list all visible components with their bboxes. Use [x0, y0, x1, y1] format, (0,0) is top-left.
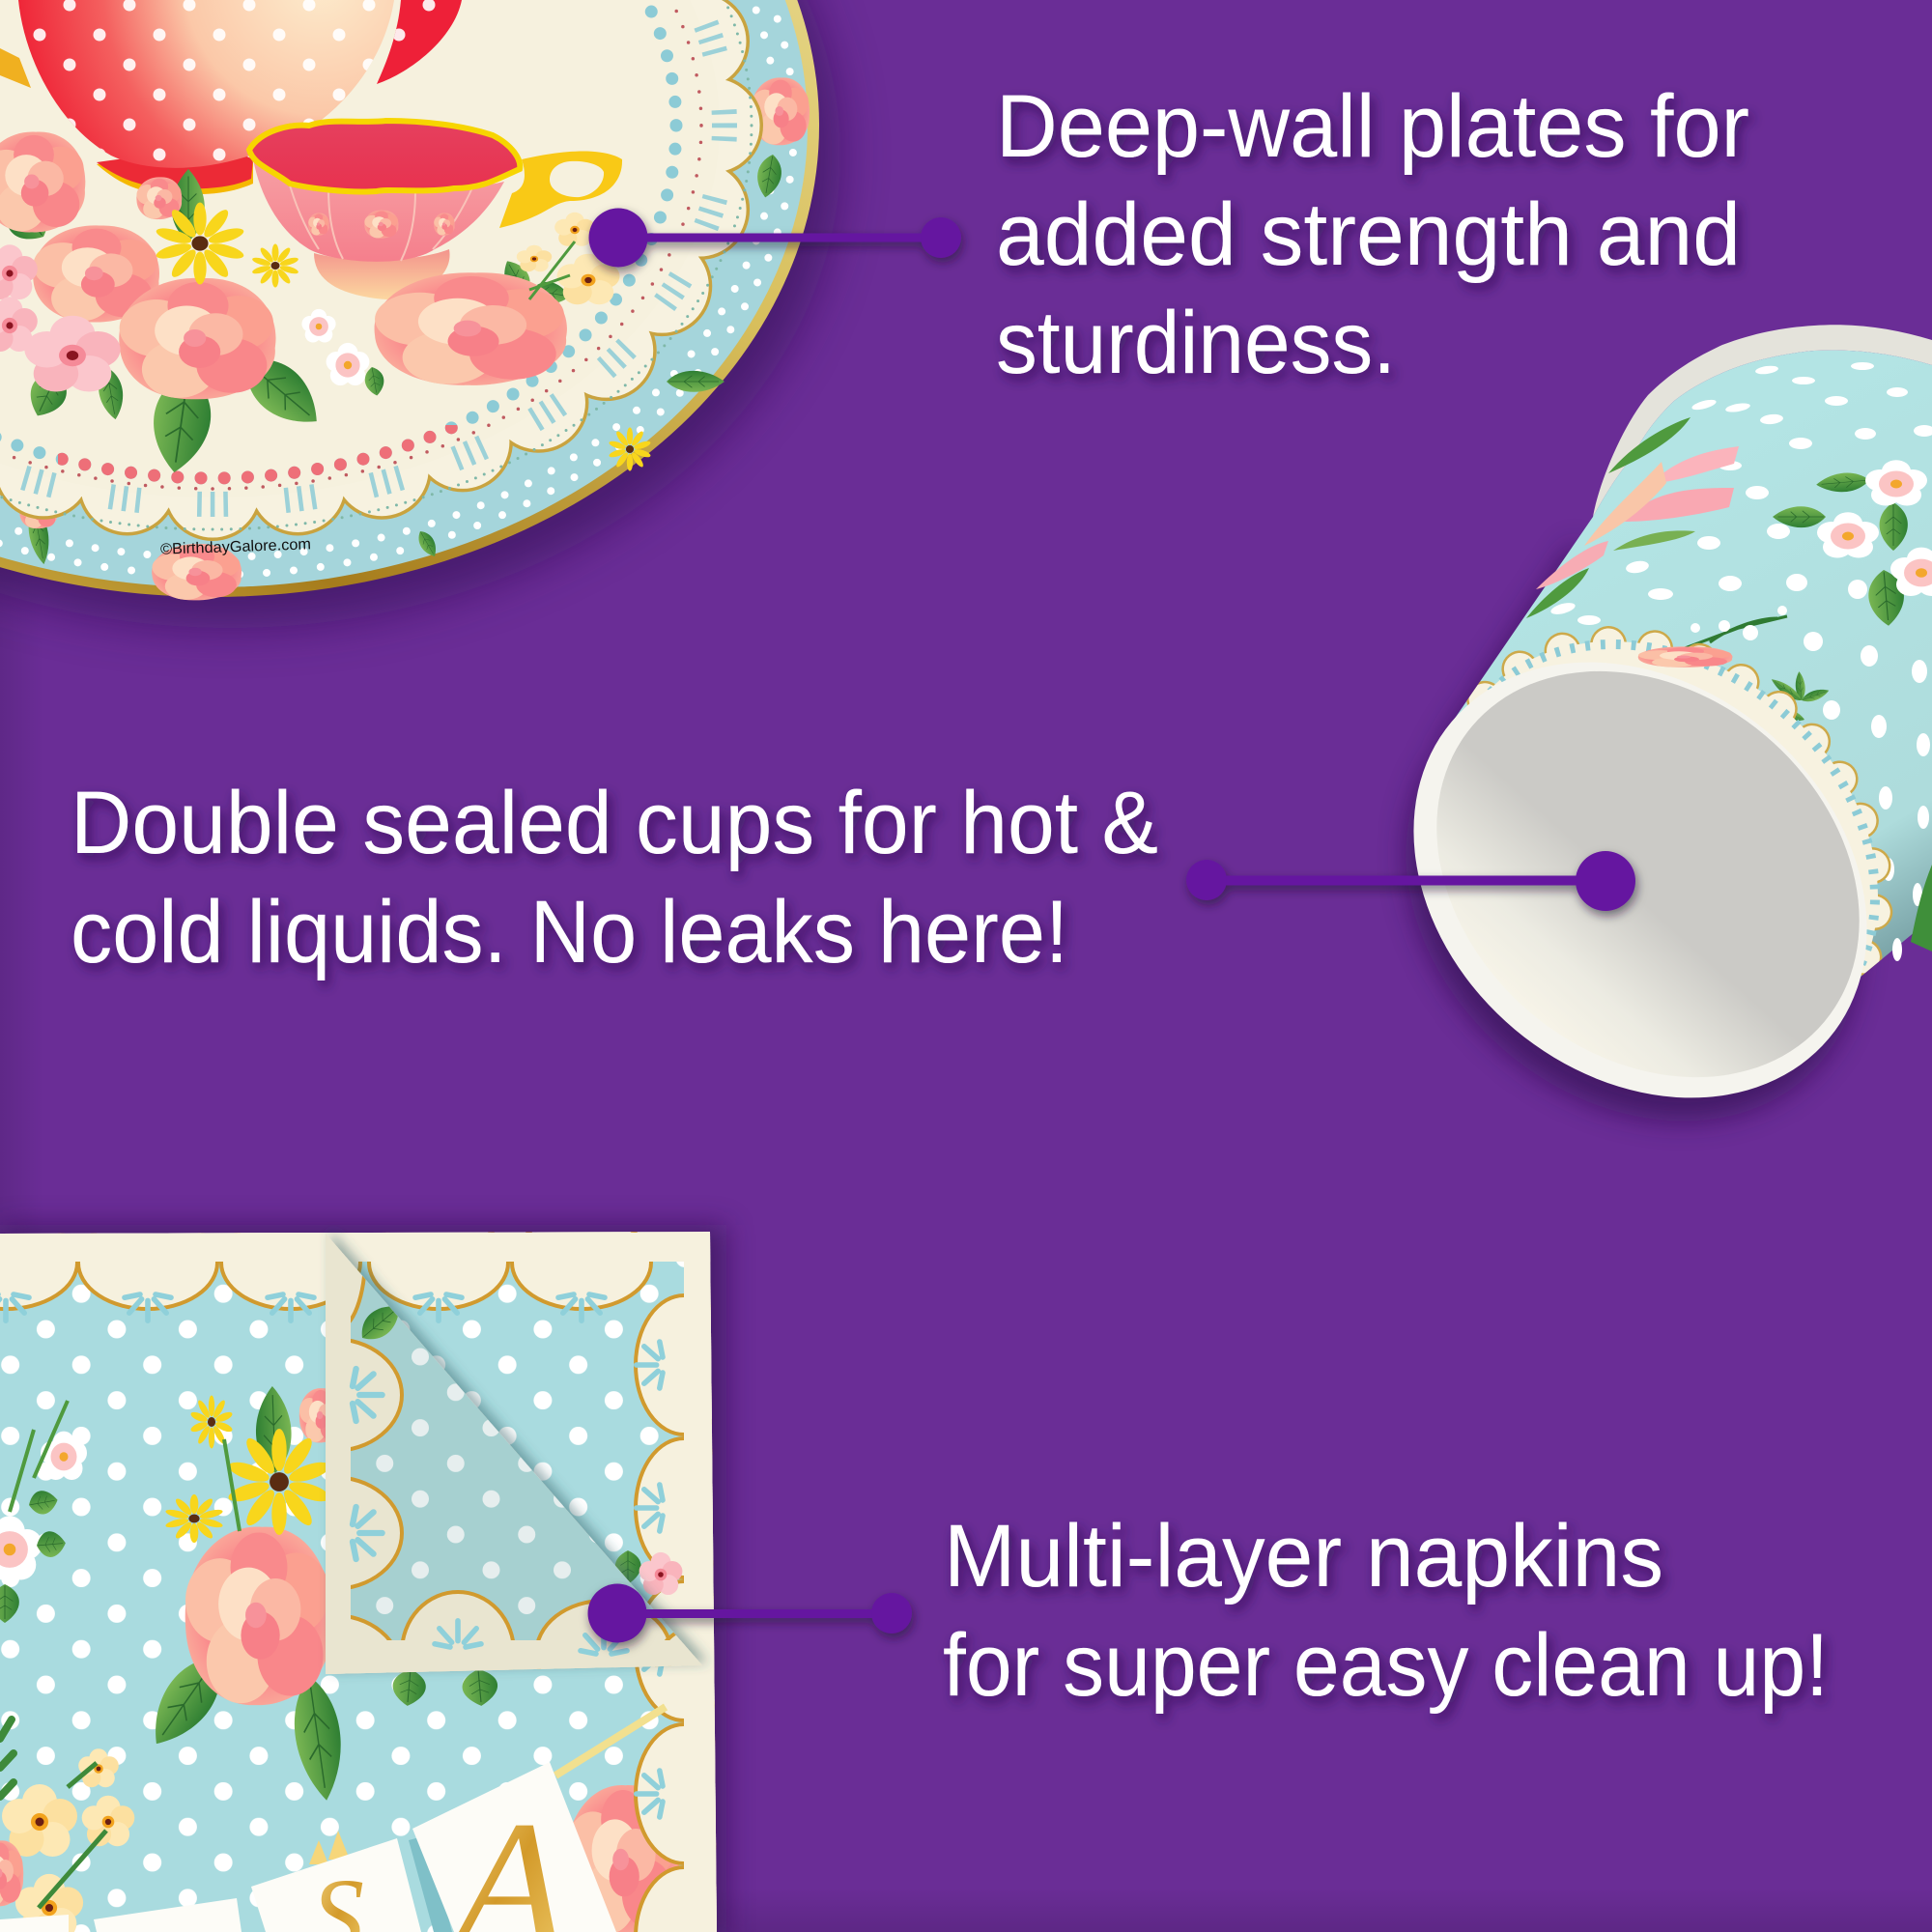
napkin folded flap: [323, 1233, 711, 1679]
text: cups: cold liquids. No leaks here!: [71, 883, 1068, 981]
napkin base: [0, 1232, 717, 1932]
cup bottom outer rim: [1326, 572, 1932, 1188]
plate florals: [0, 132, 619, 476]
panel: napkin: [0, 1183, 734, 1932]
panel: paper cup: [1395, 325, 1932, 1132]
napkin corner leaves: [607, 1550, 682, 1625]
napkin bunting flags: [0, 1762, 616, 1932]
text: plates: Deep-wall plates for: [996, 77, 1749, 176]
teapot: [0, 0, 462, 194]
cup florals: [1526, 417, 1932, 952]
panel: paper plate: [0, 0, 840, 628]
plate gold rim: [0, 0, 819, 597]
napkin shadow: [0, 1225, 726, 1932]
callout: plates connector: [589, 209, 961, 267]
napkin bunting string: [555, 1707, 666, 1776]
text: plates: sturdiness.: [996, 294, 1396, 392]
napkin florals: [0, 1385, 679, 1932]
plate scalloped lace edge: [0, 0, 752, 529]
text: cups: Double sealed cups for hot &: [71, 774, 1158, 872]
cup shadow: [1319, 541, 1932, 1211]
text: napkins: Multi-layer napkins: [944, 1507, 1663, 1605]
cup bottom inner disc: [1355, 587, 1932, 1161]
cup body: [1452, 351, 1932, 978]
callout: napkins connector: [587, 1584, 912, 1642]
plate shadow: [0, 0, 840, 628]
text: plates: added strength and: [996, 185, 1741, 284]
plate blue dotted band: [0, 0, 808, 587]
cup lace band: [1466, 626, 1893, 976]
cup polka dots: [1549, 362, 1932, 961]
cup rim: [1593, 325, 1932, 517]
bead ring: [0, 0, 676, 478]
plate copyright text: ©BirthdayGalore.com: [160, 536, 311, 558]
text: napkins: [943, 1507, 1829, 1715]
band florals: [19, 77, 810, 600]
napkin blue field with dots: [0, 1256, 688, 1932]
text: cups: [71, 774, 1158, 981]
callout: cups connector: [1186, 851, 1635, 911]
napkin lace border: [0, 1216, 732, 1932]
teacup: [249, 121, 622, 299]
text: plates: [996, 77, 1749, 392]
text: napkins: for super easy clean up!: [943, 1616, 1829, 1715]
